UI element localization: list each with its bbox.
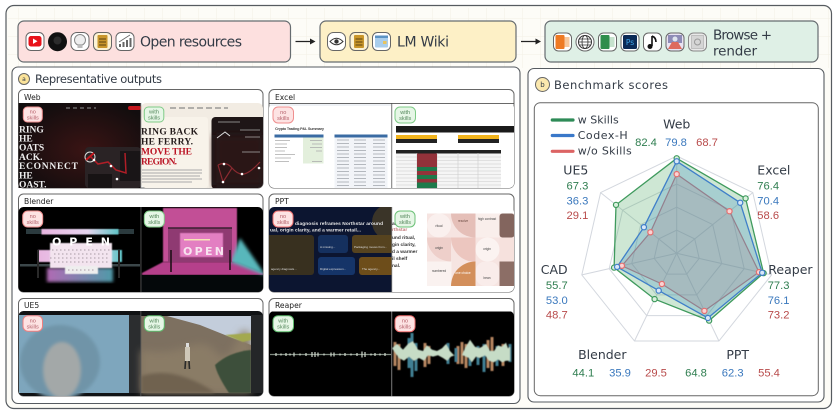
label: excel scores: [757, 162, 790, 222]
label: excel scores: 58.6: [757, 210, 779, 222]
card: blender: Blender: [24, 197, 54, 206]
card: ppt: one choice: [455, 271, 471, 275]
label: PPT scores: 64.8: [685, 368, 707, 380]
tag: no skills: [23, 211, 43, 227]
legend: [552, 114, 632, 158]
card: reaper: Reaper: [275, 301, 303, 310]
icon: music note: [644, 33, 662, 51]
label: UE5 scores: 29.1: [567, 210, 588, 222]
icon: photoshop: [621, 33, 639, 51]
arrow: wiki to browse: [521, 38, 541, 44]
label: blender scores: 29.5: [645, 368, 667, 380]
label: reaper scores: 77.3: [768, 280, 789, 292]
icon: github: [48, 32, 67, 51]
tag: with skills: with: [148, 109, 159, 115]
tag: with skills: [273, 316, 294, 332]
label: web scores: 79.8: [665, 137, 687, 149]
card: web: RING BACK: [141, 128, 199, 138]
badge a: a: [22, 76, 26, 83]
tag: with skills: skills: [399, 116, 411, 122]
card: ppt: d a warmer: [392, 249, 417, 255]
card: ppt: origin: [483, 247, 491, 251]
label: reaper scores: 76.1: [768, 295, 789, 307]
card: excel: [269, 90, 515, 188]
card: ppt: gin clarity,: [392, 242, 416, 248]
card: web: REGION.: [141, 158, 177, 168]
label: reaper scores: 73.2: [768, 310, 789, 322]
tag: with skills: with: [399, 214, 410, 220]
label: blender scores: 44.1: [572, 368, 594, 380]
arrow: resources to wiki: [296, 38, 316, 44]
icon: excel: [598, 33, 616, 51]
card: ppt: agency diagnosis...: [271, 267, 297, 271]
panel: LM wiki: [320, 21, 516, 62]
label: excel scores: 70.4: [757, 195, 779, 207]
tag: with skills: skills: [148, 220, 161, 226]
badge b: b: [540, 81, 545, 89]
badge b: [536, 78, 550, 92]
card: ppt: origin: [435, 246, 443, 250]
panel: browse and render: [545, 21, 818, 62]
card: ppt: Digital expression...: [320, 267, 346, 271]
legend: Codex-H: [578, 129, 628, 142]
heading: browse + render: Browse +: [713, 28, 772, 44]
radar: Codex-H: [614, 159, 765, 321]
card: excel: Crypto Trading P&L Summary: [275, 127, 325, 131]
tag: with skills: with: [277, 319, 288, 325]
tag: no skills: no: [280, 214, 286, 220]
card: UE5: UE5: [24, 301, 39, 310]
legend: w Skills: [578, 114, 619, 126]
tag: no skills: skills: [277, 116, 289, 122]
legend: w/o Skills: [578, 144, 632, 158]
panel: benchmark scores: [528, 68, 824, 402]
panel: representative outputs: [12, 67, 520, 404]
card: ppt: [264, 194, 514, 292]
label: UE5 scores: UE5: [563, 162, 588, 178]
card: web: Web: [24, 93, 41, 102]
card: ppt: Packaging moves from...: [354, 245, 387, 249]
tag: with skills: skills: [148, 324, 161, 330]
card: web: HE: [19, 134, 33, 144]
icon: powerpoint: [554, 33, 572, 51]
icon: youtube: [26, 32, 44, 50]
card: ppt: numbered: [432, 269, 446, 273]
icon: chart: [116, 32, 134, 50]
badge a: [18, 74, 30, 84]
card: ppt: resolve: [458, 219, 468, 223]
heading: representative outputs: Representative outputs: [35, 72, 162, 86]
tag: no skills: no: [30, 214, 36, 220]
icon: document: [94, 32, 112, 50]
heading: LM wiki: LM Wiki: [397, 34, 449, 50]
card: ppt: ual, origin clarity, and a warmer retail...: [270, 228, 361, 234]
tag: with skills: skills: [399, 220, 411, 226]
tag: no skills: no: [30, 109, 36, 115]
icon: reaper: [688, 33, 706, 51]
label: excel scores: Excel: [757, 162, 790, 178]
tag: no skills: no: [280, 110, 286, 116]
label: CAD scores: CAD: [541, 262, 568, 277]
tag: no skills: [395, 316, 415, 332]
tag: with skills: skills: [148, 115, 160, 121]
tag: no skills: skills: [399, 325, 411, 331]
label: UE5 scores: 67.3: [567, 180, 588, 192]
card: ppt: PPT: [275, 197, 289, 206]
card: web: [18, 90, 266, 191]
card: web: OAST.: [19, 181, 47, 191]
label: CAD scores: 55.7: [546, 280, 568, 292]
label: PPT scores: 62.3: [722, 368, 744, 380]
tag: with skills: [144, 107, 164, 122]
card: blender: [18, 194, 264, 292]
label: reaper scores: Reaper: [768, 262, 813, 277]
card: reaper: [269, 298, 514, 396]
card: web: ACK.: [19, 153, 42, 163]
card: ppt: The agency...: [362, 267, 380, 271]
label: PPT scores: 55.4: [758, 368, 780, 380]
tag: with skills: with: [399, 110, 410, 116]
tag: with skills: [144, 316, 164, 331]
icon: arxiv brain: [71, 32, 89, 50]
tag: with skills: with: [148, 318, 159, 324]
label: CAD scores: 48.7: [546, 310, 568, 322]
label: PPT scores: [685, 347, 780, 380]
card: excel: Excel: [275, 93, 295, 102]
radar grid: [582, 156, 772, 341]
card: web: HE FERRY.: [141, 138, 193, 148]
icon: photoshop: Ps: [626, 38, 634, 47]
tag: no skills: [23, 107, 42, 122]
label: blender scores: 35.9: [609, 368, 631, 380]
card: web: ECONNECT: [19, 162, 79, 172]
label: CAD scores: [541, 262, 568, 322]
tag: no skills: skills: [27, 220, 39, 226]
radar: w Skills: [612, 156, 766, 323]
label: reaper scores: [768, 262, 813, 322]
tag: no skills: [273, 211, 293, 227]
label: blender scores: Blender: [578, 347, 627, 362]
card: blender: OPEN: [183, 245, 224, 258]
tag: no skills: skills: [277, 220, 289, 226]
label: UE5 scores: 36.3: [567, 195, 588, 207]
label: web scores: [635, 116, 718, 149]
card: web: RING: [19, 125, 44, 135]
card: web: MOVE THE: [141, 148, 192, 158]
card: ppt: und ritual,: [392, 235, 416, 241]
card: blender: OPEN: [52, 236, 110, 248]
tag: no skills: no: [402, 319, 408, 325]
label: UE5 scores: [563, 162, 588, 222]
card: ppt: high contrast: [478, 217, 496, 221]
tag: with skills: [395, 211, 415, 227]
heading: open resources: Open resources: [140, 34, 242, 50]
panel: open resources: [18, 21, 290, 62]
icon: eye: [328, 32, 346, 50]
label: PPT scores: PPT: [726, 347, 749, 362]
tag: no skills: [273, 107, 294, 123]
card: ppt: ritual: [436, 224, 443, 228]
label: excel scores: 76.4: [757, 180, 779, 192]
icon: document: [350, 32, 368, 50]
card: web: OATS: [19, 144, 44, 154]
card: ppt: diagnosis reframes Northstar around: [295, 221, 383, 227]
card: ppt: A missing...: [320, 245, 336, 249]
heading: browse + render: render: [713, 44, 757, 60]
tag: with skills: skills: [277, 325, 289, 331]
card: ppt: ames: [392, 222, 405, 227]
card: ppt: nal.: [392, 263, 400, 269]
tag: no skills: skills: [27, 324, 39, 330]
tag: with skills: with: [148, 214, 159, 220]
tag: no skills: skills: [27, 115, 39, 121]
icon: globe: [576, 33, 594, 51]
tag: with skills: [144, 211, 164, 227]
label: web scores: 82.4: [635, 137, 657, 149]
label: CAD scores: 53.0: [546, 295, 568, 307]
label: blender scores: [572, 347, 667, 380]
radar: w/o Skills: [622, 174, 759, 311]
label: web scores: Web: [663, 116, 690, 132]
card: web: HE: [19, 171, 33, 181]
icon: web code: [372, 32, 390, 50]
tag: no skills: no: [30, 318, 36, 324]
label: web scores: 68.7: [696, 137, 718, 149]
tag: with skills: [395, 107, 416, 123]
card: ppt: il shelf: [392, 256, 408, 262]
heading: benchmark scores: Benchmark scores: [554, 78, 668, 92]
icon: blender render: [666, 33, 684, 51]
card: ppt: bean: [483, 276, 491, 280]
tag: no skills: [23, 316, 42, 331]
card: UE5: [18, 298, 264, 399]
card: ppt: rthstar: [392, 227, 407, 233]
